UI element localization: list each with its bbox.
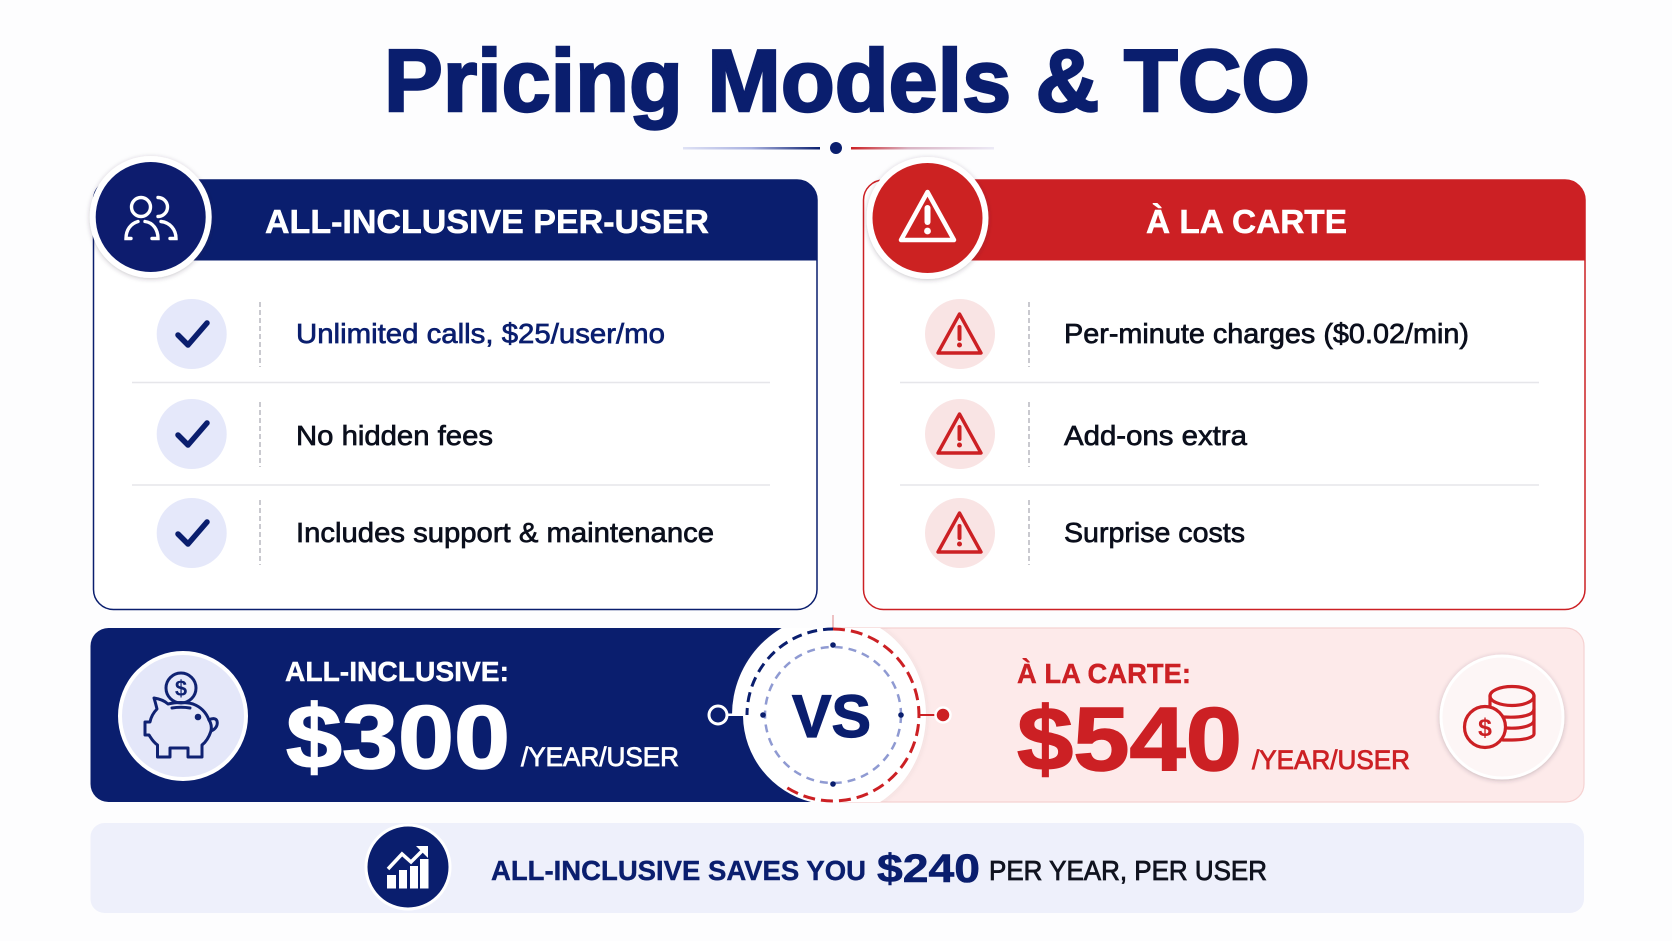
list item: add-ons extra [925,399,1247,469]
list item: surprise costs: Surprise costs [1064,517,1245,548]
panel: all-inclusive per-user [93,159,817,610]
price: $540: $540 [1017,690,1242,790]
unit: per year per user: /YEAR/USER [521,742,679,772]
heading: all-inclusive per-user: ALL-INCLUSIVE PER-USER [265,203,709,240]
heading: a la carte: À LA CARTE [1146,203,1347,240]
list item: includes support [157,498,714,568]
title: Pricing Models & TCO [384,31,1310,130]
icon: piggy bank [120,653,246,779]
panel: all-inclusive price [90,628,840,802]
price: $300: $300 [286,688,510,788]
icon: warning large [870,160,986,276]
icon: coins [1441,656,1563,778]
savings text: PER YEAR, PER USER [989,855,1267,886]
savings text: ALL-INCLUSIVE SAVES YOU [491,855,866,886]
savings text: $240 [877,847,980,891]
icon: piggy bank: $ [175,676,187,701]
label: all-inclusive: ALL-INCLUSIVE: [285,656,509,687]
list item: includes support: Includes support & maintenance [296,517,714,548]
list item: add-ons extra: Add-ons extra [1064,420,1247,451]
panel: a la carte [864,160,1585,610]
list item: surprise costs [925,498,1245,568]
list item: per-minute charges: Per-minute charges ($0.02/min) [1064,318,1469,349]
connector: right node [936,708,950,722]
panel: a la carte price [840,628,1584,802]
list item: per-minute charges [925,299,1469,369]
list item: no hidden fees [157,399,493,469]
label: a la carte: À LA CARTE: [1017,658,1191,689]
list item: unlimited calls: Unlimited calls, $25/user/mo [296,318,665,349]
icon: growth chart [366,825,450,909]
connector: left node [709,706,727,724]
savings text [491,847,1267,891]
list item: unlimited calls [157,299,665,369]
list item: no hidden fees: No hidden fees [296,420,493,451]
panel header: all-inclusive [140,180,817,260]
panel: savings banner [90,823,1584,913]
panel header: a la carte [920,180,1585,260]
unit: per year per user: /YEAR/USER [1252,745,1410,775]
icon: coins: $ [1478,714,1492,742]
vs badge [709,614,950,816]
text: vs: VS [792,683,871,750]
icon: users [93,159,209,275]
